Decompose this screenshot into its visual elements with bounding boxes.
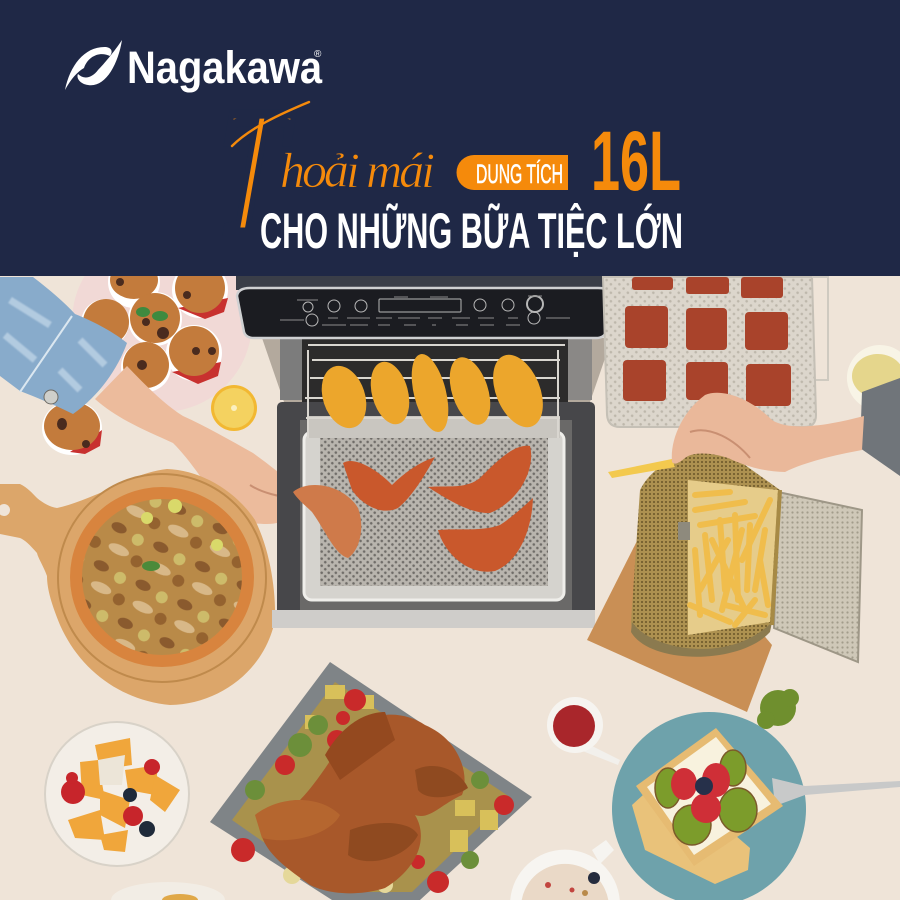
upper rack bbox=[305, 345, 565, 438]
door cavity bbox=[300, 420, 572, 610]
tray inner bbox=[232, 682, 510, 892]
cutting board bbox=[587, 535, 772, 712]
hand and forearm bbox=[672, 393, 864, 472]
wooden board bbox=[0, 469, 275, 705]
basket rim bbox=[631, 622, 772, 657]
panel: muffin plate bbox=[42, 232, 257, 455]
grey sleeve bbox=[860, 378, 900, 476]
panel: fruit plate bbox=[45, 722, 189, 866]
panel: fry basket bbox=[587, 450, 862, 712]
baking tray bbox=[210, 662, 532, 900]
capacity badge: DUNG TÍCH bbox=[476, 159, 563, 189]
fork bbox=[772, 778, 900, 806]
cylinder basket bbox=[631, 450, 780, 656]
oven body bbox=[277, 402, 595, 616]
basket inside bbox=[688, 480, 778, 635]
script heading: T bbox=[202, 73, 303, 272]
denim sleeve and arm bbox=[0, 277, 309, 524]
cream bbox=[647, 737, 771, 855]
jerky pieces bbox=[623, 277, 791, 406]
kiwi slices bbox=[655, 750, 757, 845]
panel: roast chicken tray bbox=[210, 662, 532, 900]
fruit bbox=[61, 738, 180, 852]
open mesh door bbox=[774, 492, 862, 662]
panel: toast plate bbox=[612, 712, 900, 900]
denim sleeve bbox=[0, 277, 127, 414]
blueberry bbox=[695, 777, 713, 795]
thumb shading bbox=[250, 485, 302, 500]
muffin group bbox=[42, 256, 228, 455]
panel: pizza board bbox=[0, 469, 275, 705]
mesh tray bbox=[603, 277, 816, 427]
oven interior bbox=[262, 338, 612, 418]
oven base trim bbox=[272, 610, 595, 628]
panel: jerky tray bbox=[603, 277, 828, 427]
broccoli bbox=[757, 689, 799, 729]
held french fry bbox=[608, 459, 675, 478]
dried mango slices bbox=[314, 348, 553, 436]
bar bbox=[772, 490, 780, 625]
capacity badge bbox=[456, 155, 568, 190]
registered mark: ® bbox=[314, 49, 322, 60]
script heading bbox=[202, 73, 435, 272]
white plate bbox=[45, 722, 189, 866]
pink plate bbox=[72, 232, 252, 412]
oven top band bbox=[236, 276, 611, 290]
vegetables bbox=[231, 685, 514, 893]
french fries bbox=[690, 492, 770, 625]
script heading: hoải mái bbox=[280, 142, 435, 198]
chicken wings bbox=[293, 446, 533, 572]
bottom bowl bbox=[510, 840, 620, 900]
blue plate bbox=[612, 712, 806, 900]
capacity value: 16L bbox=[591, 114, 681, 208]
right arm holding fry bbox=[608, 378, 900, 478]
sauce bowl bbox=[547, 697, 620, 765]
bottom plate bbox=[111, 882, 225, 900]
icon: Nagakawa swoosh bbox=[65, 40, 122, 90]
upper toast bbox=[636, 728, 783, 866]
tray handle rail bbox=[812, 277, 828, 380]
basket clasp bbox=[678, 522, 690, 540]
arm left bbox=[95, 366, 309, 524]
photo background bbox=[0, 276, 900, 900]
roast chicken bbox=[255, 712, 468, 893]
control panel bbox=[237, 288, 611, 338]
pizza bbox=[70, 487, 254, 667]
drink cup bbox=[847, 345, 900, 411]
strawberries bbox=[671, 763, 730, 823]
brand logo bbox=[65, 40, 323, 93]
logo wordmark: Nagakawa bbox=[127, 42, 323, 93]
lower toast bbox=[632, 775, 750, 884]
lemon bbox=[211, 385, 257, 431]
panel: navy header bbox=[0, 0, 900, 276]
frying basket bbox=[304, 432, 564, 600]
panel: air fryer oven bbox=[236, 276, 612, 628]
